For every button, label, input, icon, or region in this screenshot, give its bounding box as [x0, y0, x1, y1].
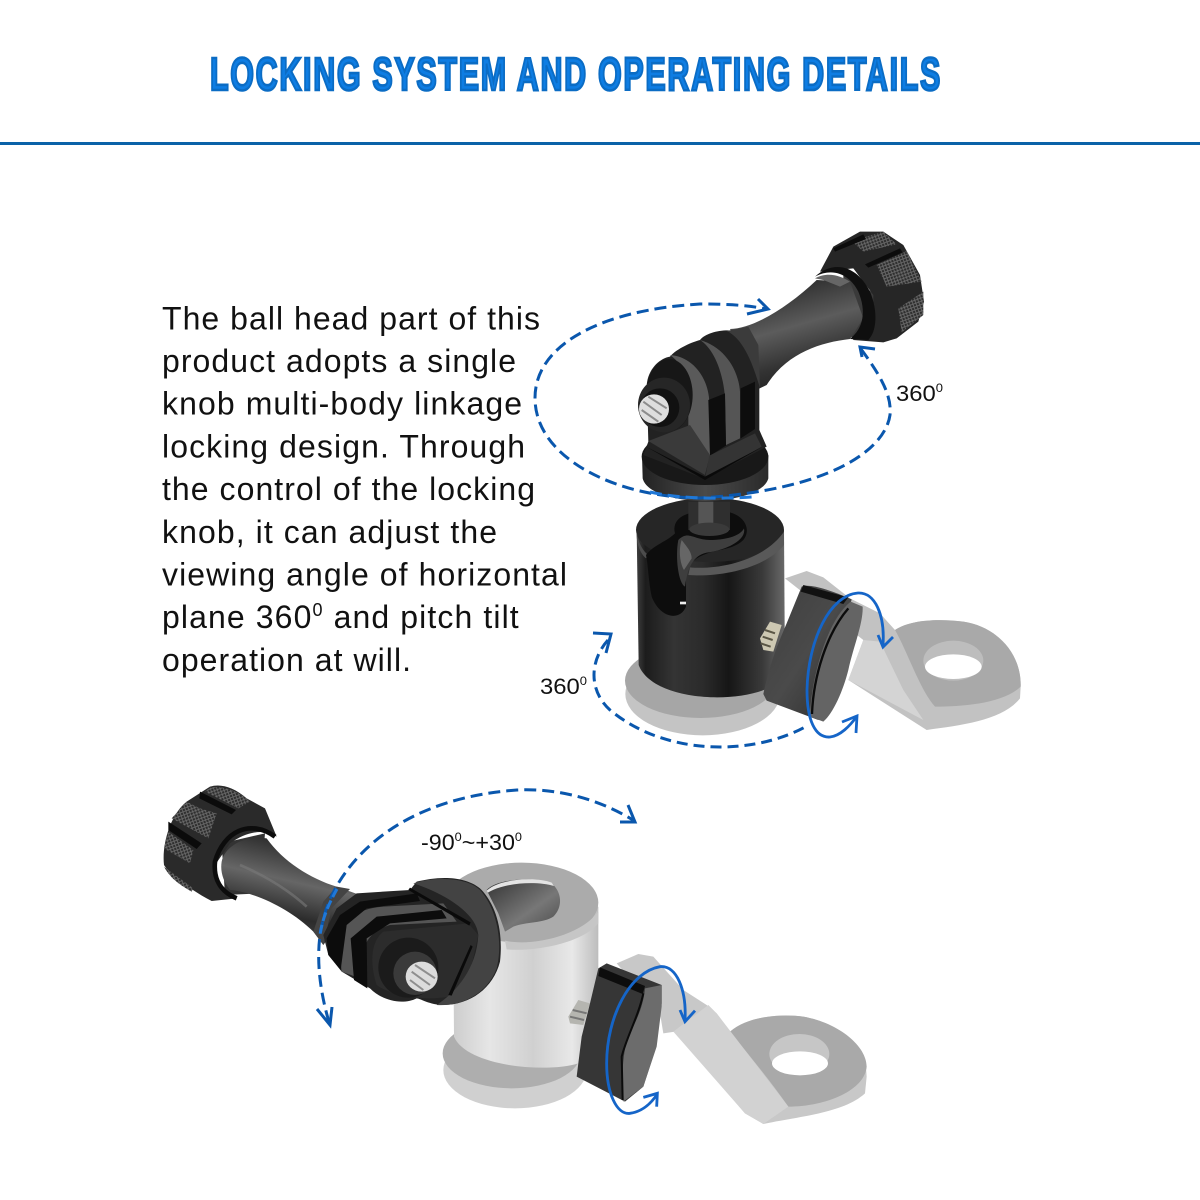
- description text block: viewing angle of horizontal: [162, 556, 567, 592]
- label: pitch range: -90: [421, 830, 453, 855]
- ball socket: [487, 879, 560, 932]
- base plate: [443, 1018, 587, 1108]
- description text block: plane 360: [162, 599, 312, 635]
- locking knob: [815, 232, 924, 342]
- locking wing knob: [763, 585, 863, 722]
- base plate: [625, 643, 780, 735]
- locking knob: [164, 785, 277, 901]
- description text block: 0: [312, 600, 324, 620]
- label: base 360: 0: [580, 674, 587, 688]
- cylinder body: [445, 863, 598, 1068]
- mount screw: [406, 962, 438, 992]
- tightening screw: [568, 1000, 590, 1025]
- description text block: product adopts a single: [162, 343, 516, 379]
- tightening screw: [760, 622, 782, 652]
- label: base 360: 360: [540, 674, 577, 699]
- swivel disc: [408, 879, 499, 1005]
- camera mount: [643, 327, 767, 480]
- cylinder body: [636, 498, 785, 697]
- mount nut: [638, 359, 693, 432]
- arrow: base 360 rotation: [593, 633, 805, 747]
- product photo: tilted ball head lower section: [443, 863, 867, 1124]
- description text block: [162, 300, 567, 678]
- arrow: knob rotation, upper: [807, 593, 893, 737]
- mounting bracket: [617, 954, 867, 1124]
- mount screw: [639, 394, 669, 424]
- knob shaft: [730, 268, 878, 389]
- product photo: tilted ball head upper section: [164, 785, 501, 1005]
- description text block: knob, it can adjust the: [162, 514, 497, 550]
- description text block: operation at will.: [162, 642, 411, 678]
- product photo: upright ball head upper section: [638, 232, 924, 501]
- mounting bracket: [785, 571, 1021, 730]
- arrow: pitch tilt range: [317, 790, 635, 1025]
- description text block: The ball head part of this: [162, 300, 540, 336]
- label: pitch range: 0: [455, 830, 462, 844]
- arrow: knob rotation, lower: [607, 967, 695, 1113]
- camera mount: [323, 878, 501, 1005]
- label: pitch range: ~+30: [462, 830, 515, 855]
- locking wing knob: [577, 963, 662, 1102]
- description text block: locking design. Through: [162, 428, 525, 464]
- description text block: knob multi-body linkage: [162, 386, 522, 422]
- product photo: upright ball head lower section: [625, 498, 1021, 735]
- label: horizontal 360: 0: [936, 381, 943, 395]
- swivel disc: [642, 428, 768, 501]
- description text block: the control of the locking: [162, 471, 535, 507]
- arrow: horizontal 360 rotation: [535, 299, 890, 498]
- knob shaft: [221, 833, 360, 945]
- description text block: and pitch tilt: [324, 599, 520, 635]
- label: pitch range: 0: [515, 830, 522, 844]
- ball slot: [646, 502, 747, 616]
- header rule: [0, 142, 1200, 145]
- mount nut: [378, 938, 438, 998]
- label: horizontal 360: 360: [896, 381, 933, 406]
